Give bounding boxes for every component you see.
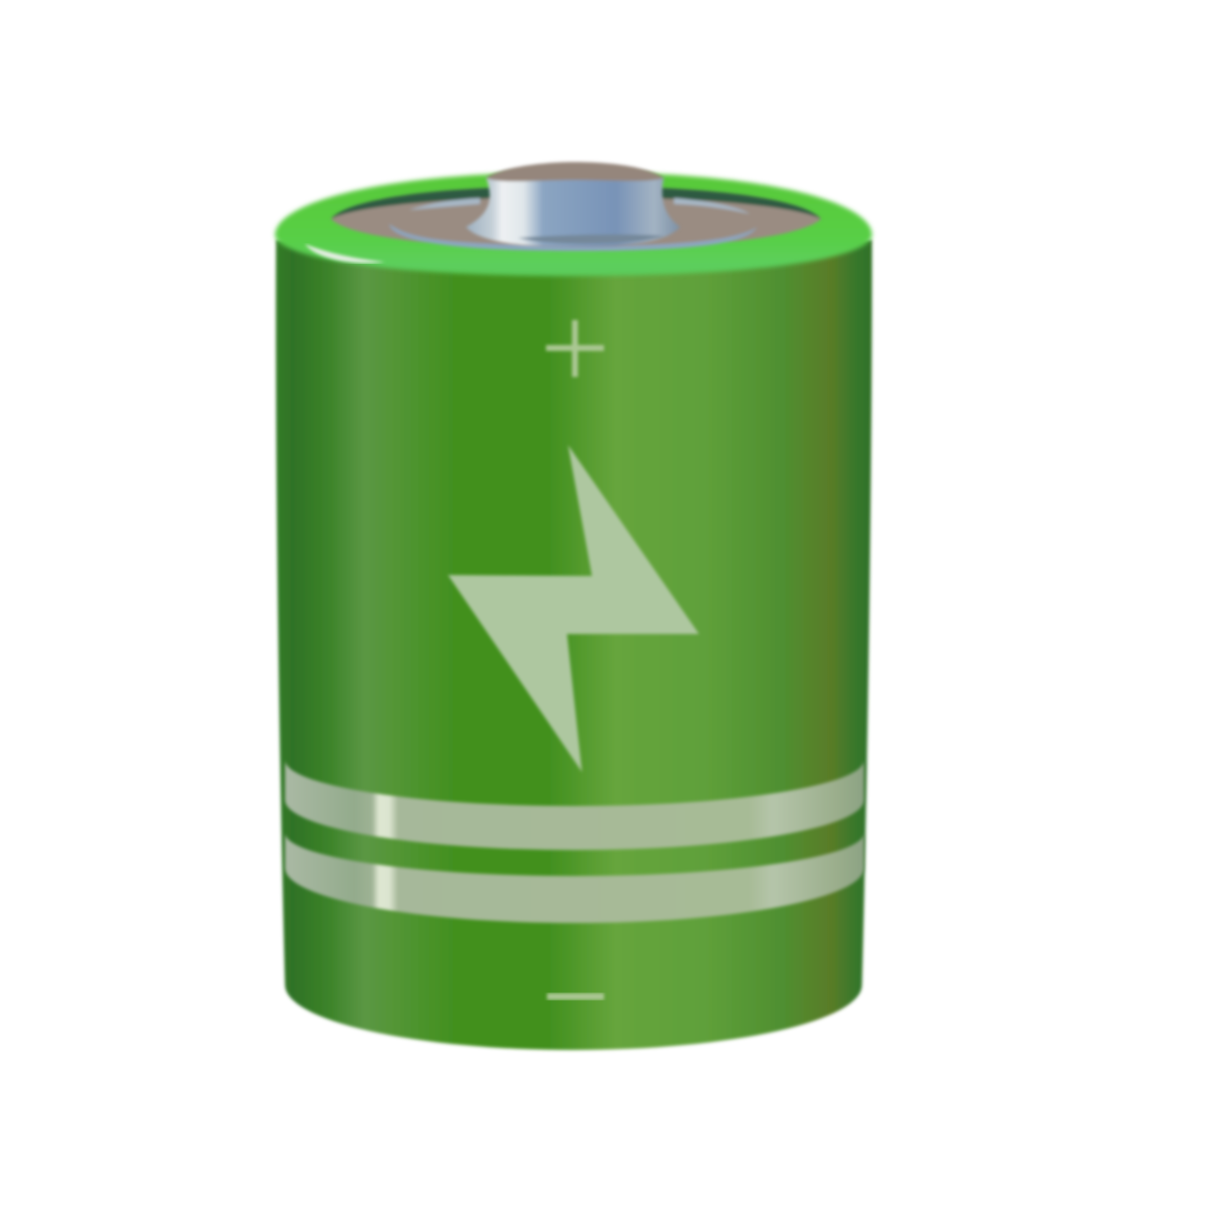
recessed top cavity bbox=[331, 186, 821, 251]
rim highlight bbox=[305, 244, 385, 263]
silver bands bbox=[285, 760, 864, 923]
band: lower bbox=[285, 833, 864, 923]
minus sign bbox=[547, 993, 604, 1000]
plus sign bbox=[546, 320, 604, 377]
lightning bolt bbox=[448, 445, 699, 772]
band: upper bbox=[285, 760, 864, 850]
battery body bbox=[276, 240, 872, 1050]
terminal cap bbox=[466, 162, 680, 247]
top rim bbox=[275, 172, 872, 276]
